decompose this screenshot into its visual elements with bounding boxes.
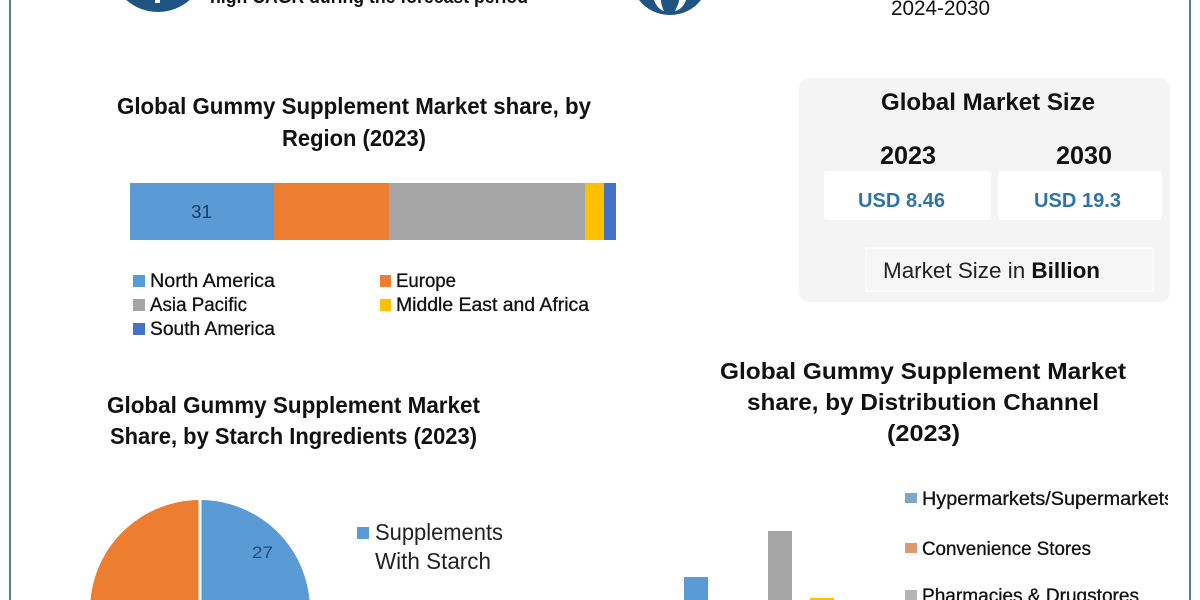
legend: starch ingredients xyxy=(357,519,503,574)
icon: top left circle badge xyxy=(126,0,190,12)
heading: market share by region xyxy=(117,93,591,151)
heading: market share by starch ingredients: Share, by Starch Ingredients (2023) xyxy=(110,423,477,449)
value: 2023 market size: 2023 xyxy=(880,142,936,170)
legend: regions: Europe xyxy=(396,271,456,292)
panel: global market size xyxy=(799,78,1170,302)
legend: distribution channels: Convenience Stores xyxy=(922,539,1091,560)
legend: distribution channels xyxy=(905,489,1174,600)
heading: market share by distribution channel xyxy=(720,358,1126,446)
heading: market share by starch ingredients: Global Gummy Supplement Market xyxy=(107,392,480,418)
heading: market share by region: Global Gummy Supplement Market share, by xyxy=(117,93,591,119)
legend: regions: Asia Pacific xyxy=(150,295,247,316)
value: 2023 market size xyxy=(824,142,991,220)
legend: regions: South America xyxy=(150,319,275,340)
heading: global market size: Global Market Size xyxy=(881,89,1095,116)
legend: starch ingredients: Supplements xyxy=(375,519,503,545)
legend: regions xyxy=(133,271,589,340)
stacked bar chart: region share: 31 xyxy=(191,202,212,222)
legend: regions: Middle East and Africa xyxy=(396,295,589,316)
bar chart: distribution channel xyxy=(684,531,834,600)
value: 2030 market size xyxy=(998,142,1162,220)
icon: top middle circle badge xyxy=(639,0,701,15)
heading: market share by distribution channel: share, by Distribution Channel xyxy=(747,389,1099,415)
heading: market share by region: Region (2023) xyxy=(282,125,426,151)
heading: market share by starch ingredients xyxy=(107,392,480,449)
heading: market share by distribution channel: (2023) xyxy=(887,420,960,446)
legend: regions: North America xyxy=(150,271,275,292)
note: market size unit: Market Size in Billion xyxy=(883,258,1100,283)
stacked bar chart: region share xyxy=(130,183,616,240)
legend: distribution channels: Hypermarkets/Supermarkets xyxy=(922,489,1174,510)
note: market size unit xyxy=(866,248,1153,291)
legend: starch ingredients: With Starch xyxy=(375,548,491,574)
pie chart: starch ingredients xyxy=(90,500,310,600)
heading: market share by distribution channel: Global Gummy Supplement Market xyxy=(720,358,1126,384)
pie chart: starch ingredients: 27 xyxy=(252,543,273,562)
value: 2030 market size: 2030 xyxy=(1056,142,1112,170)
value: 2030 market size: USD 19.3 xyxy=(1034,190,1121,212)
value: 2023 market size: USD 8.46 xyxy=(858,190,945,212)
